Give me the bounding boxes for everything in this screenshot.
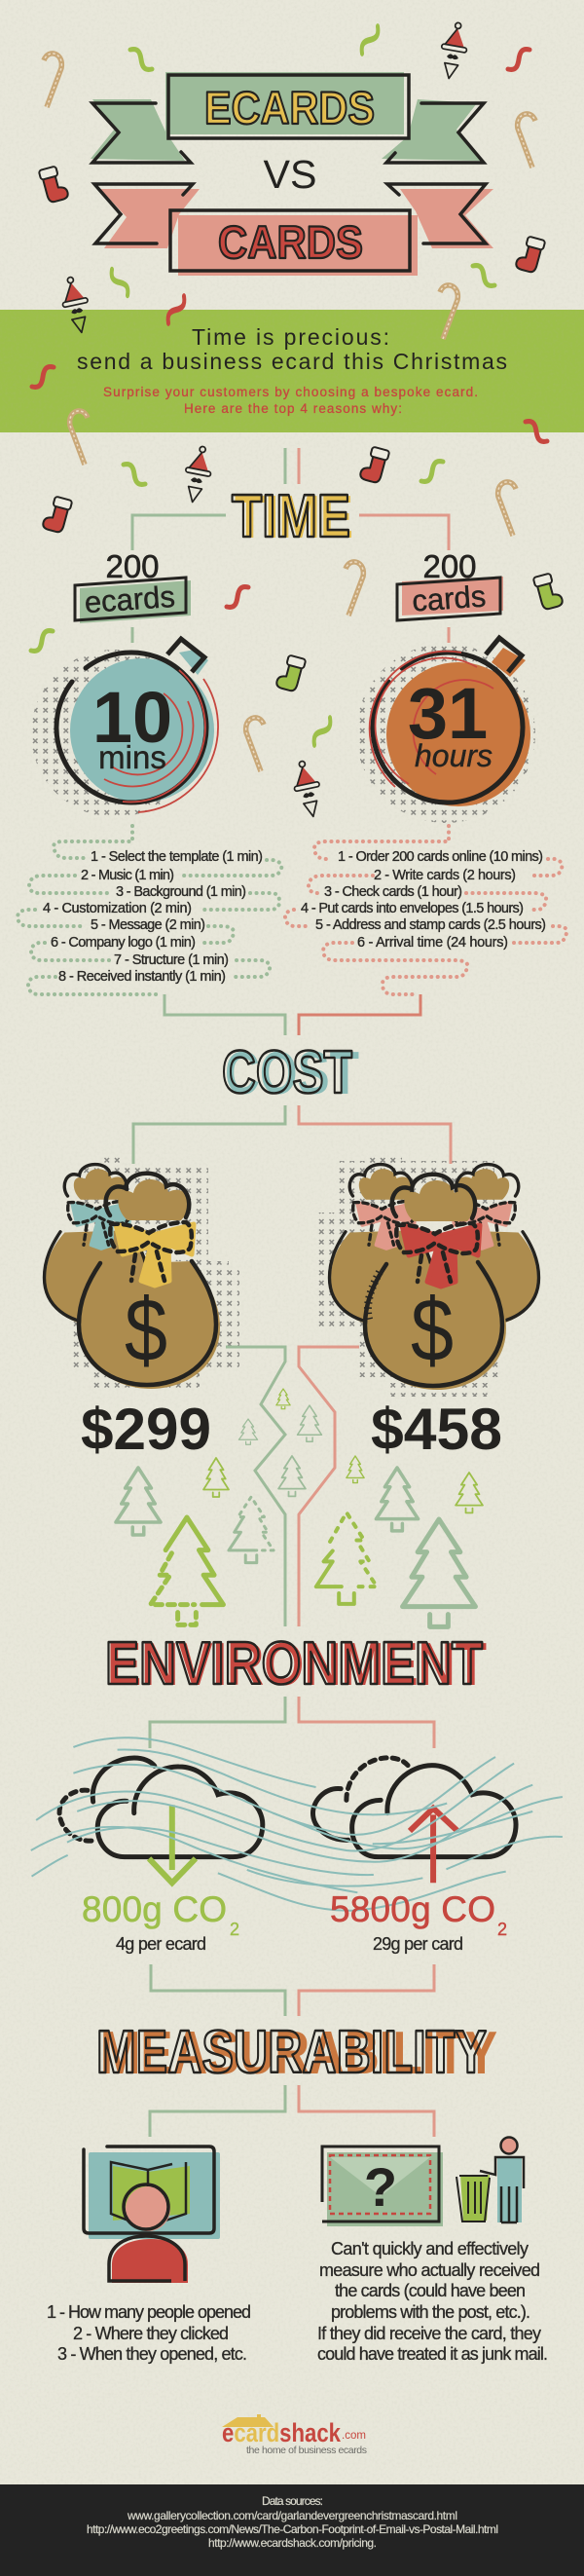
- data sources: Data sources:: [262, 2494, 323, 2508]
- heading: measurability: MEASURABILITY: [96, 2019, 487, 2086]
- label: 200 ecards: ecards: [84, 579, 176, 619]
- data sources: http://www.ecardshack.com/pricing.: [208, 2536, 377, 2550]
- wind lines: [31, 1737, 563, 1911]
- card steps list: [301, 849, 546, 951]
- dotted path: ecard steps: [18, 826, 281, 994]
- text: card measurability: the cards (could have been: [335, 2281, 526, 2300]
- logo: ecardshack: [222, 2414, 367, 2456]
- ecard steps list: 2 - Music (1 min): [81, 868, 174, 883]
- icon: money bags $299: $: [125, 1281, 167, 1380]
- co2 card figure: 29g per card: [373, 1934, 463, 1954]
- label: 200 cards: [397, 548, 503, 620]
- heading: ecards: ECARDS: [204, 82, 375, 133]
- dotted path: card steps: [285, 826, 566, 994]
- icon: unknown envelope and bin: ?: [364, 2156, 397, 2218]
- heading: time: TIME: [232, 483, 350, 550]
- logo: ecardshack: the home of business ecards: [246, 2445, 367, 2456]
- heading: cost: COST: [225, 1040, 359, 1107]
- connectors: environment: [150, 1697, 434, 2016]
- text: card measurability: could have treated it as junk mail.: [317, 2344, 548, 2364]
- label: 200 cards: 200: [422, 548, 477, 584]
- dotted backdrop: left bags: [72, 1153, 239, 1393]
- ecard steps list: 8 - Received instantly (1 min): [58, 969, 226, 985]
- icon: unknown envelope and bin: [322, 2137, 524, 2226]
- stopwatch: 10 mins: 10: [92, 677, 172, 758]
- connectors: cost: [133, 994, 451, 1164]
- intro text: Here are the top 4 reasons why:: [184, 401, 402, 416]
- card steps list: 6 - Arrival time (24 hours): [357, 935, 508, 951]
- co2 ecard figure: 4g per ecard: [116, 1934, 206, 1954]
- winding connectors: [226, 1347, 359, 1626]
- heading: environment: ENVIRONMENT: [107, 1631, 487, 1699]
- section: time: [18, 448, 566, 994]
- card steps list: 2 - Write cards (2 hours): [374, 868, 516, 883]
- santa hats: [57, 20, 471, 819]
- label: 200 ecards: [75, 548, 191, 623]
- text: ecard measurability: 2 - Where they clicked: [73, 2324, 229, 2343]
- section: measurability: [47, 2019, 548, 2364]
- text: card measurability: If they did receive the card, they: [317, 2324, 541, 2343]
- ecard steps list: 1 - Select the template (1 min): [91, 849, 263, 865]
- stopwatch: 10 mins: [31, 639, 218, 817]
- arrow: up: [410, 1809, 457, 1883]
- footer: [0, 2484, 584, 2576]
- label: 200 cards: cards: [411, 579, 487, 618]
- candy canes: [44, 54, 535, 771]
- stopwatch: 31 hours: hours: [415, 738, 493, 773]
- icon: person reading on screen: [84, 2147, 220, 2283]
- section: environment: [31, 1630, 563, 2016]
- illustration: clouds and wind: [31, 1737, 563, 1911]
- header banner: ecards: [91, 72, 484, 163]
- intro text: Surprise your customers by choosing a bespoke ecard.: [103, 385, 478, 399]
- intro text: [77, 324, 507, 416]
- ecard steps list: 7 - Structure (1 min): [114, 952, 229, 968]
- vs label: VS: [263, 152, 317, 197]
- price: $458: $458: [371, 1397, 502, 1462]
- green intro band: [0, 310, 584, 432]
- text: ecard measurability: [47, 2302, 251, 2364]
- ecard steps list: 3 - Background (1 min): [116, 884, 246, 900]
- stockings: [39, 165, 564, 692]
- text: ecard measurability: 3 - When they opened, etc.: [57, 2344, 247, 2364]
- section: cost: [45, 994, 539, 1626]
- data sources: [87, 2494, 498, 2550]
- header decorations: [31, 20, 564, 819]
- text: card measurability: [317, 2239, 548, 2364]
- text: ecard measurability: 1 - How many people opened: [47, 2302, 251, 2322]
- card steps list: 3 - Check cards (1 hour): [324, 884, 462, 900]
- connectors: time: [132, 448, 449, 643]
- connectors: measurability: [150, 2085, 434, 2137]
- heading: time: TIME: [235, 484, 353, 551]
- intro text: send a business ecard this Christmas: [77, 349, 507, 374]
- data sources: http://www.eco2greetings.com/News/The-Carbon-Footprint-of-Email-vs-Postal-Mail.html: [87, 2522, 498, 2536]
- stopwatch: 31 hours: 31: [408, 673, 488, 754]
- label: 200 ecards: 200: [105, 548, 160, 584]
- cloud: ecard: [59, 1758, 263, 1857]
- price: $299: $299: [81, 1397, 211, 1462]
- ecard steps list: [43, 849, 263, 985]
- logo roof: [222, 2414, 274, 2427]
- co2 card figure: 5800g CO: [330, 1889, 495, 1929]
- heading: measurability: MEASURABILITY: [100, 2020, 497, 2087]
- card steps list: 5 - Address and stamp cards (2.5 hours): [315, 917, 546, 933]
- icon: money bags $458: [329, 1165, 539, 1390]
- text: card measurability: measure who actually received: [319, 2260, 540, 2280]
- co2 ecard figure: 800g CO: [82, 1889, 227, 1929]
- dotted backdrop: right bags: [316, 1153, 502, 1397]
- co2 card figure: [330, 1889, 507, 1954]
- heading: ecards: ECARDS: [204, 82, 375, 133]
- co2 card figure: 2: [497, 1920, 507, 1939]
- stopwatch: 10 mins: mins: [98, 739, 166, 775]
- ecard steps list: 4 - Customization (2 min): [43, 901, 192, 916]
- logo: ecardshack: .com: [342, 2430, 366, 2442]
- squiggles: [31, 26, 547, 745]
- cloud: card: [312, 1758, 516, 1857]
- text: card measurability: Can't quickly and effectively: [331, 2239, 529, 2259]
- co2 ecard figure: [82, 1889, 239, 1954]
- stopwatch: 31 hours: [356, 638, 535, 823]
- trees: [116, 1389, 483, 1626]
- arrow: down: [149, 1805, 196, 1883]
- data sources: www.gallerycollection.com/card/garlandevergreenchristmascard.html: [127, 2509, 457, 2522]
- co2 ecard figure: 2: [230, 1920, 239, 1939]
- card steps list: 4 - Put cards into envelopes (1.5 hours): [301, 901, 524, 916]
- icon: money bags $299: [45, 1165, 220, 1389]
- heading: cards: CARDS: [218, 217, 363, 269]
- icon: money bags $458: $: [411, 1281, 454, 1380]
- heading: cards: CARDS: [218, 216, 363, 268]
- text: card measurability: problems with the post, etc.).: [331, 2302, 530, 2322]
- heading: environment: ENVIRONMENT: [105, 1630, 483, 1698]
- intro text: Time is precious:: [192, 324, 389, 350]
- logo: ecardshack: ecardshack: [222, 2418, 342, 2447]
- header banner: cards: [94, 184, 493, 276]
- card steps list: 1 - Order 200 cards online (10 mins): [338, 849, 543, 865]
- ecard steps list: 5 - Message (2 min): [91, 917, 205, 933]
- ecard steps list: 6 - Company logo (1 min): [51, 935, 196, 951]
- heading: cost: COST: [222, 1039, 352, 1106]
